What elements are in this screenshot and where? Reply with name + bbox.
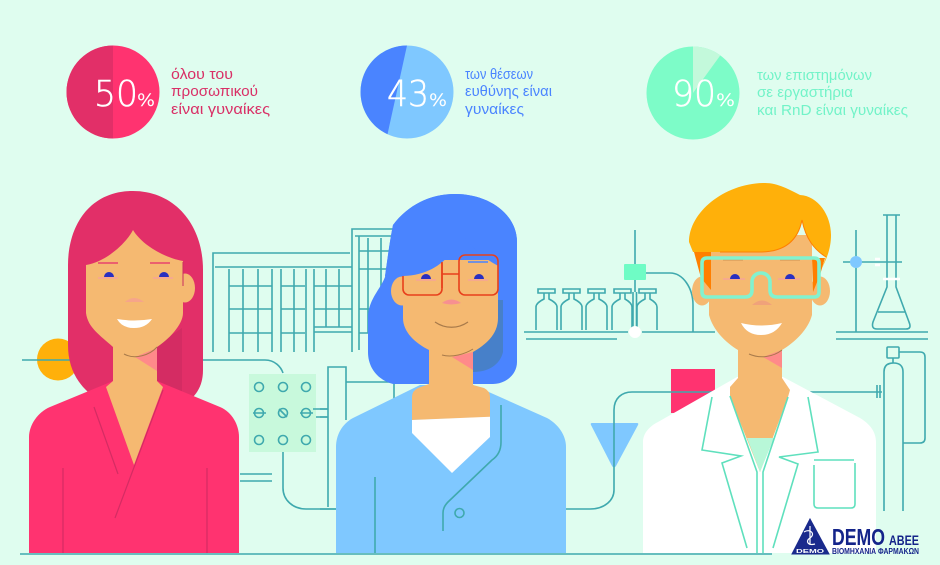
eyes [98,263,173,278]
background: pipework and valve board [22,360,340,509]
caption 43%: γυναίκες [465,101,524,118]
right glasses lens [459,255,498,295]
caption 50%: όλου του [171,66,233,83]
left lens side and bridge [442,262,459,288]
icon: green valve block [624,264,646,280]
face [86,230,183,357]
icon: orange sun circle [37,338,79,380]
figure: woman in pink [29,191,239,553]
logo: DEMO ABEE [792,519,919,556]
fringe [385,194,517,276]
stat: 90 percent of scientists [646,46,908,140]
valve circles [253,382,328,444]
funnel [591,423,638,468]
pipes [22,360,340,509]
icon: blue clamp dot [850,256,862,268]
neckline skin [730,372,790,472]
background: gas cylinder [810,347,925,511]
eyes [723,260,800,279]
lapels and pocket [702,396,855,553]
flask clips [875,259,900,279]
caption 50%: προσωπικού [171,83,258,100]
logo tagline: ΒΙΟΜΗΧΑΝΙΑ ΦΑΡΜΑΚΩΝ [832,547,919,556]
pink blouse [29,381,239,553]
white undershirt [412,417,490,473]
neckline [106,375,163,465]
hair shadow [473,300,503,372]
value 43%: 43 [387,74,429,115]
neck [429,340,473,390]
coat seam and button [375,405,501,553]
smile [435,322,468,327]
neck shadow [763,350,782,368]
icon: white joint [629,326,641,338]
mint undershirt [747,438,774,472]
valve panel [249,374,316,452]
background: tall cabinet behind second figure [320,367,394,509]
neckline skin [412,375,490,420]
background: factory building [213,229,393,352]
caption 43% [465,66,552,118]
value 43%: % [429,91,447,111]
nose [125,298,144,302]
caption 90% [757,67,908,119]
value 50%: 50 [94,74,138,115]
logo triangle: DEMO [796,549,825,555]
stat: 43 percent of management [360,46,552,138]
eyebrow and eyes [416,262,488,280]
left glasses lens [403,258,442,295]
hair [368,194,517,384]
nose [752,300,772,305]
caption 90%: σε εργαστήρια [757,84,853,101]
pink block [671,369,715,413]
value 90%: % [716,91,735,111]
pie chart 43% [360,46,454,138]
blouse fold lines [63,390,207,553]
logo suffix: ABEE [889,532,919,548]
ears [692,276,830,306]
caption 50%: είναι γυναίκες [171,101,270,118]
value 90%: 90 [672,74,716,115]
logo name: DEMO [832,524,885,550]
ear [391,276,413,306]
ground line [20,553,772,555]
hair shadow [157,328,182,392]
neck shadow [135,348,157,371]
stat: 50 percent of staff [66,46,270,138]
white lab coat [643,377,876,553]
pipe through funnel [566,392,720,509]
goggles [702,258,819,297]
ear [175,274,195,302]
caption 90%: των επιστημόνων [757,67,872,84]
caption 43%: ευθύνης είναι [465,83,552,100]
smile [741,323,782,335]
caption 50% [171,66,270,118]
hairline shadow [720,220,826,257]
figure: woman in blue [336,194,566,553]
hair [689,183,831,268]
hair [68,191,203,398]
neck shadow [452,352,473,370]
face [709,235,812,358]
background: flask on stand [836,215,928,339]
figure: woman in lab coat [643,183,876,553]
background: vials on shelf [524,230,715,339]
caption 43%: των θέσεων [465,66,533,83]
nose [442,300,461,304]
side hair [694,252,825,292]
face [403,260,498,355]
caption 90%: και RnD είναι γυναίκες [757,102,908,119]
pie chart 50% [66,46,160,138]
neck [738,335,782,385]
smile [117,319,152,328]
blue coat [336,385,566,553]
value 50%: % [137,91,155,111]
pie chart 90% [646,46,740,140]
neck [113,335,157,390]
